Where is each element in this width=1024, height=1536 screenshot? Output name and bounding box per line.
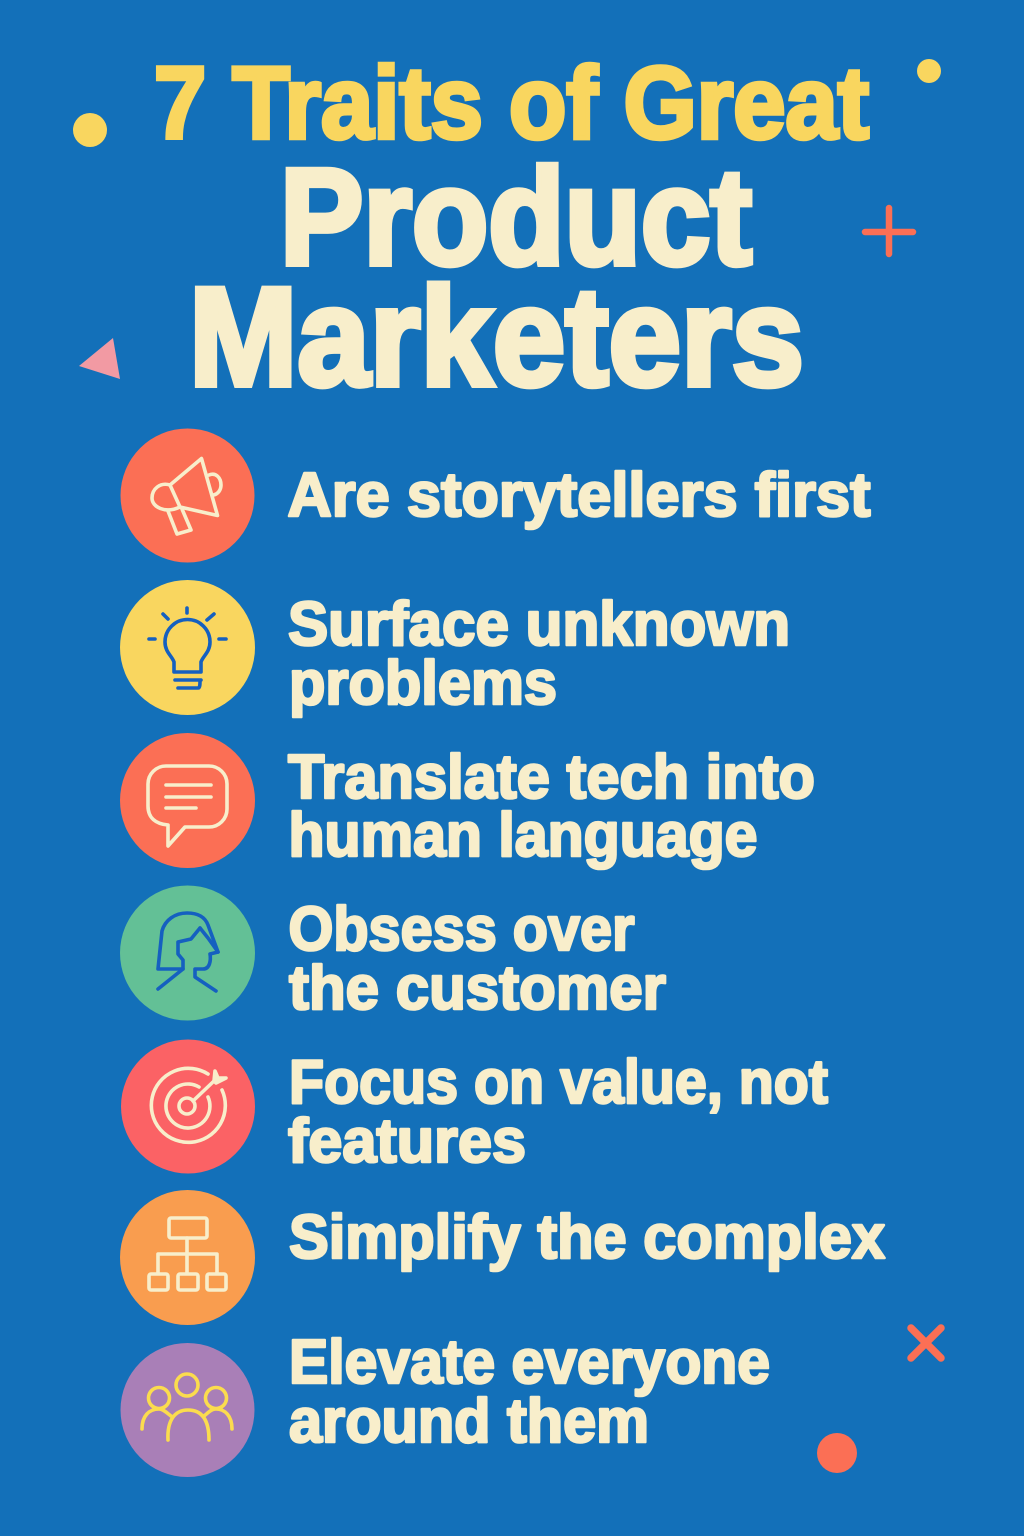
icon: speech bubble (120, 733, 255, 868)
trait text (288, 743, 815, 870)
decoration: coral dot (817, 1433, 857, 1473)
trait 6: simplify (120, 1190, 885, 1325)
trait text: problems (289, 649, 557, 718)
trait text: features (288, 1107, 526, 1176)
trait text: Surface unknown (288, 590, 790, 659)
decoration: coral x (911, 1328, 941, 1358)
trait text: around them (289, 1387, 649, 1456)
trait text: the customer (289, 954, 666, 1023)
trait text (288, 590, 790, 718)
trait text: Focus on value, not (289, 1048, 828, 1117)
title (154, 46, 869, 415)
icon: target with arrow (121, 1040, 255, 1174)
decoration: yellow dot left (73, 113, 107, 147)
trait text: Obsess over (288, 895, 634, 964)
trait text: human language (288, 801, 758, 870)
decoration: coral plus (865, 208, 913, 254)
title line: Marketers: Marketers (189, 258, 804, 415)
title line: 7 Traits of Great: 7 Traits of Great (154, 46, 869, 160)
trait 2: unknown problems (120, 580, 790, 718)
trait 4: customer (120, 886, 666, 1023)
decoration: yellow dot right (917, 59, 941, 83)
title line: Product: Product (280, 141, 752, 294)
icon: group of people (120, 1343, 254, 1477)
trait text (289, 1328, 770, 1456)
trait 7: elevate (120, 1328, 770, 1477)
trait text: Elevate everyone (289, 1328, 770, 1397)
decoration: pink triangle (79, 338, 120, 379)
icon: person profile (120, 886, 255, 1020)
trait 1: storytellers (120, 428, 870, 562)
trait text: Translate tech into (288, 743, 815, 812)
trait 3: translate tech (120, 733, 815, 870)
trait text: Are storytellers first (288, 461, 870, 530)
trait text (288, 895, 666, 1023)
icon: hierarchy chart (120, 1190, 255, 1325)
trait text: Simplify the complex (289, 1203, 885, 1272)
trait 5: value (121, 1040, 828, 1176)
trait text (288, 1048, 828, 1176)
icon: megaphone (120, 428, 254, 562)
icon: light bulb (120, 580, 255, 715)
